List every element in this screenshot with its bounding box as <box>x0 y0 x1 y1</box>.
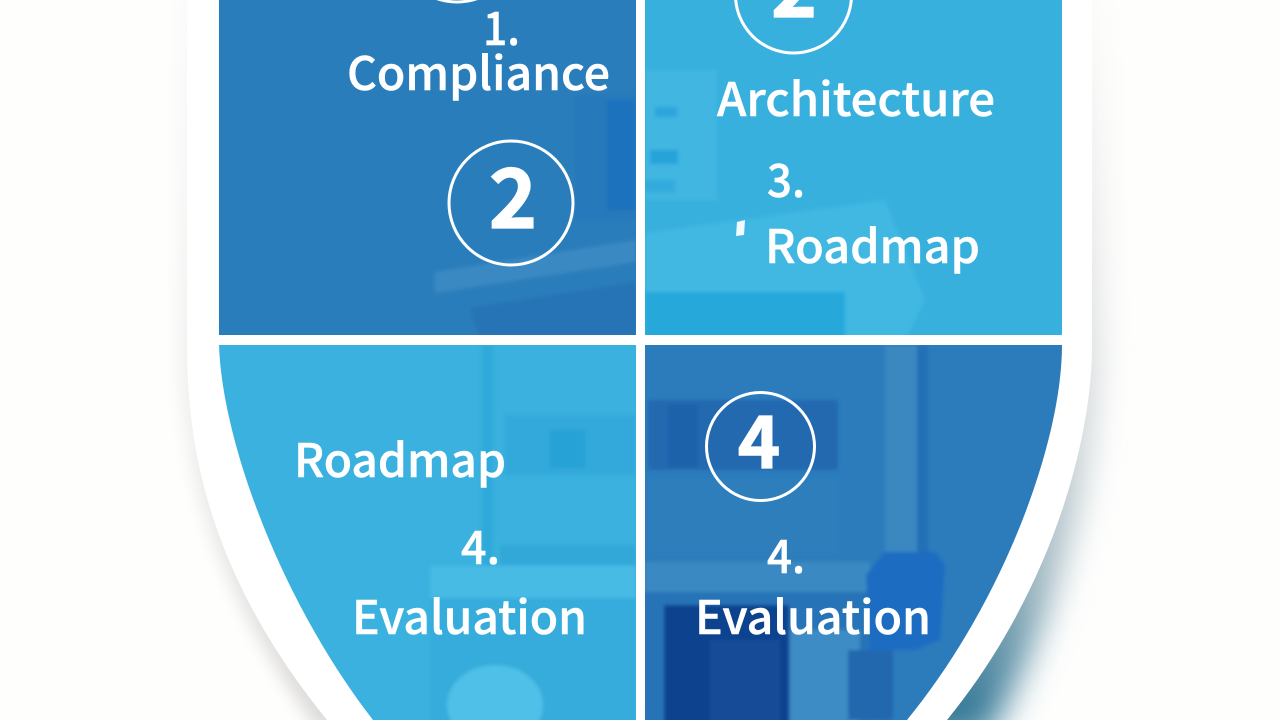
label: Compliance: Compliance <box>347 38 610 104</box>
number badge 2 (left): 2 <box>489 133 537 252</box>
number badge 2 (left) <box>449 133 573 265</box>
label: 4. (right): 4. <box>767 521 805 587</box>
label: 4. (left): 4. <box>461 512 500 578</box>
label: 3.: 3. <box>767 145 805 211</box>
label: Evaluation (left): Evaluation <box>352 582 587 648</box>
panel: bottom left quadrant <box>219 345 636 720</box>
number badge 4: 4 <box>738 384 780 489</box>
panel: top left quadrant <box>219 0 636 340</box>
label: Roadmap (top right): Roadmap <box>765 211 980 277</box>
shield quadrants <box>219 0 1062 720</box>
shield white border <box>187 0 1092 720</box>
number badge 2 (right, cropped) <box>736 0 852 53</box>
number badge 4 <box>706 384 814 500</box>
label: Roadmap (bottom left): Roadmap <box>294 425 506 491</box>
shield shadow <box>179 0 1098 720</box>
panel: top right quadrant <box>645 0 1062 340</box>
label: Architecture: Architecture <box>717 64 995 130</box>
panel: bottom right quadrant <box>645 345 1062 720</box>
label: Evaluation (right): Evaluation <box>695 582 931 648</box>
shield infographic <box>182 0 1112 720</box>
partial circle top left <box>395 0 519 2</box>
small white mark <box>736 220 745 236</box>
